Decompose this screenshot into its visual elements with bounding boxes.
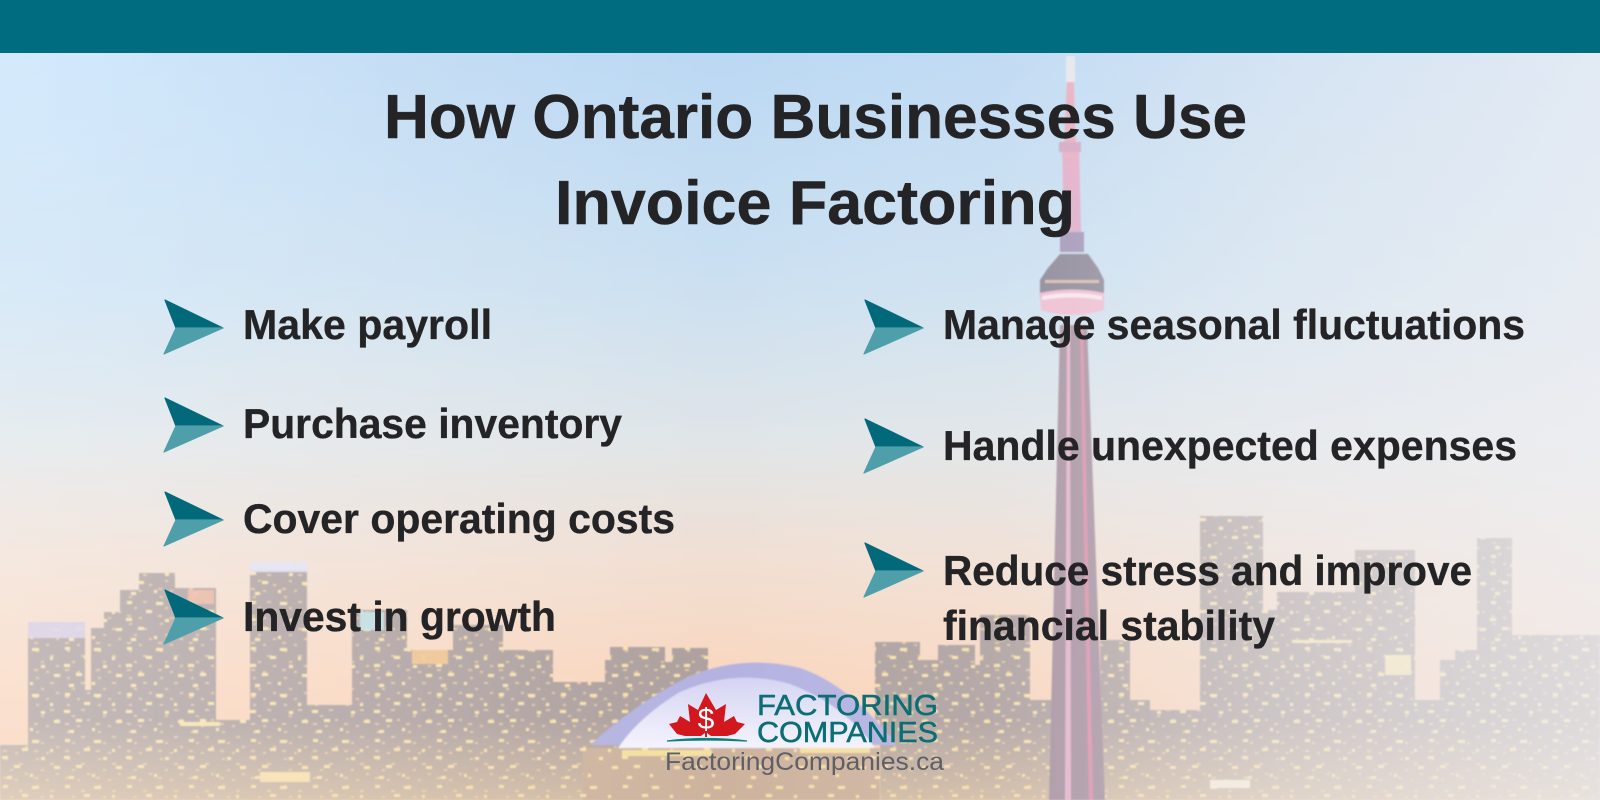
title (384, 83, 1247, 238)
icon: red maple leaf with dollar sign (667, 693, 747, 741)
icon: red maple leaf with dollar sign: $ (698, 703, 715, 736)
item: purchase inventory: Purchase inventory (243, 400, 622, 447)
item: reduce stress and improve financial stability: Reduce stress and improve (943, 547, 1472, 594)
top teal band (0, 0, 1600, 53)
logo wordmark: FACTORING (757, 690, 938, 722)
item: reduce stress and improve financial stability: financial stability (943, 602, 1275, 649)
list: right column (864, 300, 1525, 649)
item: invest in growth: Invest in growth (243, 593, 556, 640)
item: make payroll (164, 300, 492, 354)
list: left column (164, 300, 675, 644)
item: handle unexpected expenses: Handle unexpected expenses (943, 422, 1517, 469)
website URL: FactoringCompanies.ca (665, 748, 944, 776)
logo wordmark: COMPANIES (757, 717, 938, 749)
Rogers Centre dome (583, 663, 897, 800)
title: How Ontario Businesses Use (384, 83, 1247, 152)
item: make payroll: Make payroll (243, 301, 492, 348)
item: invest in growth (164, 590, 556, 644)
top-left sky glow (0, 0, 460, 500)
logo wordmark (757, 690, 938, 749)
item: cover operating costs: Cover operating costs (243, 495, 675, 542)
item: reduce stress and improve financial stability (864, 543, 1472, 649)
title: Invoice Factoring (555, 169, 1075, 238)
Toronto skyline photo illustration (0, 516, 1600, 800)
logo: Factoring Companies (665, 690, 944, 776)
CN Tower (1040, 56, 1105, 800)
item: manage seasonal fluctuations: Manage seasonal fluctuations (943, 301, 1525, 348)
